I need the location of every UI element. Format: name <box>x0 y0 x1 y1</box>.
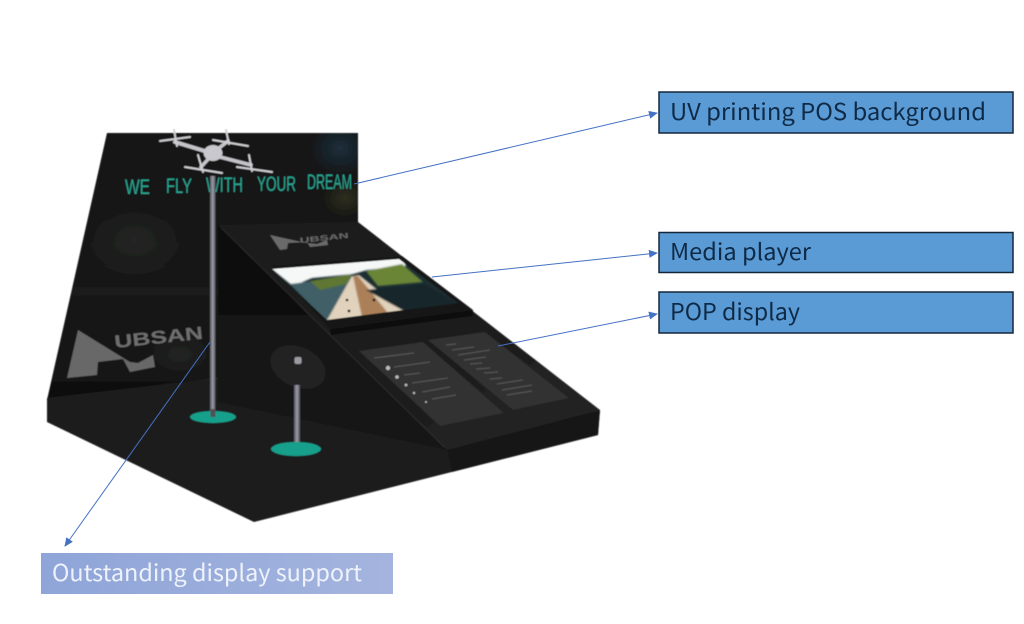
short display support with disc <box>263 337 333 456</box>
slogan text: WITH <box>206 174 243 197</box>
panel: POS display stand <box>47 118 600 522</box>
arrow: POP display callout <box>498 314 657 346</box>
sloped wedge <box>218 222 600 450</box>
arrow: background callout <box>354 113 657 184</box>
slogan text: YOUR <box>257 173 296 196</box>
back wall with UV printed background <box>47 118 374 400</box>
callout: Media player: Media player <box>670 233 811 267</box>
callout: UV printing POS background: UV printing POS background <box>670 93 986 127</box>
slogan text: WE <box>125 176 150 199</box>
logo: UBSAN on wedge: UBSAN <box>299 231 349 245</box>
callout: Media player <box>659 232 1013 272</box>
arrow: display support callout <box>65 342 210 546</box>
slogan text: FLY <box>166 175 192 198</box>
logo: large UBSAN on back wall: UBSAN <box>113 323 204 352</box>
infographic canvas <box>41 91 1014 594</box>
slogan text <box>125 171 352 199</box>
icon: drone <box>160 130 272 173</box>
media player bezel and screen <box>268 256 473 335</box>
callout: POP display <box>659 292 1013 333</box>
slogan text: DREAM <box>307 171 352 194</box>
arrow: media player callout <box>432 253 657 277</box>
POP panel: right <box>428 332 569 410</box>
callout: POP display: POP display <box>670 293 800 327</box>
tall drone support pole <box>190 176 236 423</box>
callout: Outstanding display support: Outstanding display support <box>52 554 362 588</box>
POP panel: left <box>359 342 504 426</box>
logo: UBSAN on wedge <box>270 231 349 250</box>
base platform <box>47 378 600 522</box>
logo: large UBSAN on back wall <box>67 323 204 378</box>
